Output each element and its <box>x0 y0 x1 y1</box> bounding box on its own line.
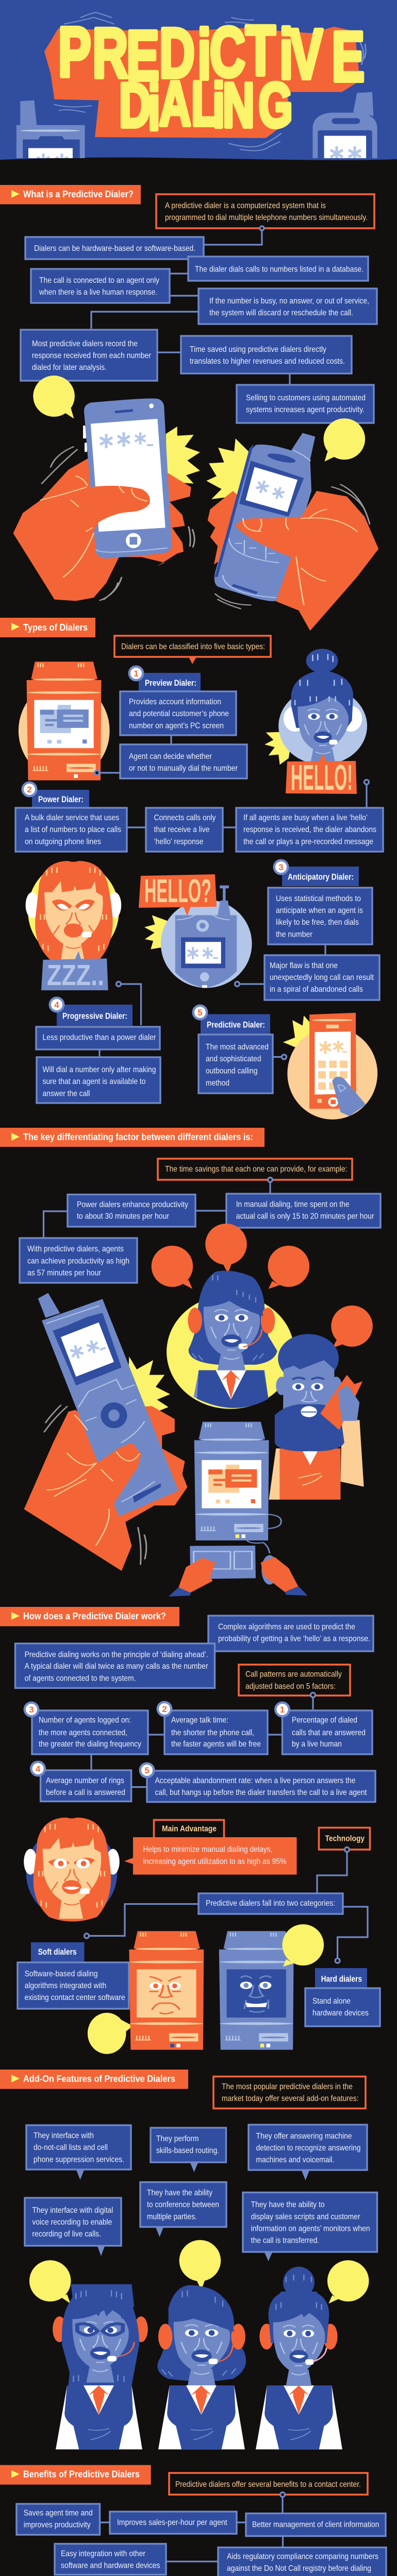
heading: What is a Predictive Dialer? <box>23 189 134 199</box>
feature: do-not-call: do-not-call lists and cell <box>34 2143 108 2152</box>
title <box>58 11 365 143</box>
factor 5: call, but hangs up before the dialer transfers the call to a live agent <box>155 1788 367 1797</box>
feature: sales scripts <box>243 2193 377 2261</box>
factor 4: 4 <box>36 1764 41 1774</box>
box: call patterns: Call patterns are automatically <box>245 1670 342 1679</box>
section: add-on features <box>0 2070 377 2449</box>
type 2: power dialer: ‘hello’ response <box>154 838 204 846</box>
box: busy number: the system will discard or reschedule the call. <box>209 309 353 317</box>
benefit: integration: software and hardware devices <box>61 2562 160 2570</box>
factor 3 <box>24 1701 148 1754</box>
factor 5: Acceptable abandonment rate: when a live person answers the <box>155 1776 356 1785</box>
factor 2: the shorter the phone call, <box>171 1728 254 1737</box>
type 5: predictive dialer <box>192 1005 287 1093</box>
heading: The key differentiating factor between different dialers is: <box>23 1132 253 1142</box>
box: record response <box>21 330 157 381</box>
type 3: anticipatory dialer: Major flaw is that one <box>270 961 338 970</box>
illustration: computer in peach circle <box>19 662 110 781</box>
type 4: progressive dialer: Will dial a number only after making <box>42 1065 156 1074</box>
benefit: compliance: against the Do Not Call registry before dialing <box>227 2564 371 2573</box>
type 1: preview dialer: Preview Dialer: <box>145 678 196 688</box>
benefit: saves time <box>16 2504 100 2535</box>
box: call patterns <box>239 1665 350 1696</box>
hello sign <box>286 754 357 798</box>
type 2: power dialer: A bulk dialer service that uses <box>25 814 119 822</box>
type 3: anticipatory dialer: anticipate when an agent is <box>276 906 363 915</box>
box: agent connection: The call is connected to an agent only <box>39 276 159 285</box>
box: predictive dialers <box>20 1238 137 1283</box>
feature: do-not-call <box>26 2125 131 2180</box>
box: record response: response received from each number <box>32 351 152 360</box>
computer and keyboard <box>169 1422 308 1597</box>
factor 1: Percentage of dialed <box>292 1716 357 1725</box>
type 4: progressive dialer: Progressive Dialer: <box>62 1011 127 1021</box>
factor 2 <box>157 1701 268 1754</box>
title: PREDiCTiVE <box>58 11 365 96</box>
feature: answering machine: machines and voicemail. <box>256 2156 334 2164</box>
type 1: preview dialer: number on agent’s PC screen <box>129 722 224 731</box>
section: key differentiating factor <box>0 1128 381 1597</box>
intro box: Predictive dialers offer several benefits to a contact center. <box>175 2480 361 2489</box>
factor 2: 2 <box>162 1704 167 1714</box>
intro box: market today offer several add-on features: <box>222 2094 359 2103</box>
soft dialers: Soft dialers <box>38 1947 77 1957</box>
feature: do-not-call: They interface with <box>34 2131 94 2140</box>
hard dialers <box>305 1968 380 2026</box>
benefit: saves time: improves productivity <box>24 2521 91 2530</box>
box: manual dialing <box>226 1194 381 1228</box>
intro box <box>169 2473 368 2495</box>
soft dialers <box>18 1942 129 2009</box>
box: dialing ahead: A typical dialer will dial twice as many calls as the number <box>25 1662 208 1671</box>
feature: skills routing: They perform <box>156 2134 199 2143</box>
type 4: progressive dialer: 4 <box>54 1000 59 1010</box>
box: busy number <box>198 289 377 324</box>
illustration: three agents with speech bubbles <box>29 2240 369 2449</box>
box: selling: Selling to customers using automated <box>246 394 366 402</box>
type 3: anticipatory dialer: 3 <box>278 862 284 872</box>
type 5: predictive dialer: Predictive Dialer: <box>207 1020 265 1030</box>
type 4: progressive dialer: Less productive than a power dialer <box>42 1033 156 1042</box>
type 2: power dialer: response is received, the dialer abandons <box>243 825 376 834</box>
type 3: anticipatory dialer <box>235 859 379 1000</box>
box: time saved: translates to higher revenues and reduced costs. <box>190 357 345 366</box>
type 2: power dialer <box>15 780 383 852</box>
feature: answering machine: They offer answering machine <box>256 2132 352 2141</box>
type 3: anticipatory dialer: the number <box>276 930 313 939</box>
benefit: sales per hour <box>110 2512 237 2534</box>
factor 2: Average talk time: <box>171 1716 228 1725</box>
box: time saved: Time saved using predictive dialers directly <box>190 345 326 354</box>
box: time saved <box>181 336 352 374</box>
illustration: walkie phone in pale circle <box>144 886 252 988</box>
illustration: two computers with faces <box>88 1924 324 2054</box>
feature: voice recording: They interface with digital <box>32 2206 113 2215</box>
benefit: sales per hour: Improves sales-per-hour per agent <box>117 2518 227 2527</box>
feature: conference: They have the ability <box>147 2189 212 2197</box>
intro box: Dialers can be classified into five basic types: <box>121 642 265 651</box>
factor 1 <box>274 1701 372 1754</box>
type 5: predictive dialer: outbound calling <box>206 1066 258 1076</box>
factor 3: the more agents connected, <box>39 1728 127 1737</box>
box: record response: dialed for later analysis. <box>32 363 107 372</box>
box: power dialers: Power dialers enhance productivity <box>77 1200 188 1209</box>
feature: sales scripts: display sales scripts and customer <box>251 2212 360 2222</box>
type 5: predictive dialer: method <box>206 1079 229 1088</box>
technology box <box>319 1828 370 1850</box>
soft dialers: Software-based dialing <box>25 1970 98 1978</box>
box: power dialers: to about 30 minutes per hour <box>77 1212 170 1221</box>
factor 1: by a live human <box>292 1740 342 1749</box>
box: algorithms: probability of getting a live ‘hello’ as a response. <box>218 1635 370 1643</box>
hard dialers: Stand alone <box>312 1997 351 2006</box>
definition box: A predictive dialer is a computerized system that is <box>165 201 326 210</box>
box: hardware or software: Dialers can be hardware-based or software-based. <box>34 244 195 253</box>
hello question sign <box>139 872 217 916</box>
type 4: progressive dialer <box>36 982 160 1103</box>
benefit: saves time: Saves agent time and <box>24 2509 93 2517</box>
feature: skills routing <box>151 2128 226 2172</box>
heading <box>0 1128 264 1147</box>
heading <box>0 2070 188 2089</box>
illustration: red-haired woman sleeping <box>26 861 121 990</box>
box: predictive dialers: can achieve productivity as high <box>27 1257 129 1265</box>
feature: answering machine: detection to recognize answering <box>256 2144 361 2153</box>
type 3: anticipatory dialer: Anticipatory Dialer: <box>288 872 354 882</box>
hard dialers: Hard dialers <box>321 1974 362 1984</box>
type 2: power dialer: If all agents are busy when a live ‘hello’ <box>243 814 368 822</box>
soft dialers: existing contact center software <box>25 1993 125 2002</box>
header phones and wiggles <box>16 12 377 168</box>
type 4: progressive dialer: answer the call <box>42 1089 90 1098</box>
intro box <box>213 2076 366 2108</box>
header band with title <box>0 0 397 168</box>
intro box <box>114 636 271 664</box>
illustration: phone with finger in peach circle <box>283 1013 377 1120</box>
illustration: two hands holding phones <box>13 376 378 631</box>
box: database: The dialer dials calls to numbers listed in a database. <box>195 265 363 274</box>
illustration: red-haired woman in blue circle <box>24 1818 120 1922</box>
benefit: client information: Better management of client information <box>252 2520 379 2529</box>
intro box: The time savings that each one can provide, for example: <box>165 1165 348 1174</box>
heading <box>0 618 95 637</box>
feature: skills routing: skills-based routing. <box>156 2146 219 2155</box>
benefit: integration: Easy integration with other <box>61 2549 146 2558</box>
benefit: client information <box>246 2513 386 2536</box>
type 1: preview dialer: and potential customer’s phone <box>129 709 229 718</box>
type 1: preview dialer <box>95 666 247 778</box>
feature: sales scripts: the call is transferred. <box>251 2236 319 2245</box>
type 1: preview dialer: 1 <box>134 669 139 679</box>
section: benefits <box>0 2465 386 2576</box>
heading: How does a Predictive Dialer work? <box>23 1611 166 1621</box>
asterisks on phone screens <box>100 432 286 501</box>
feature: sales scripts: They have the ability to <box>251 2200 325 2209</box>
technology box: Technology <box>325 1835 365 1843</box>
main advantage callout <box>124 1820 297 1875</box>
box: agent connection: when there is a live human response. <box>39 288 157 297</box>
illustration: woman with bun saying hello <box>264 649 367 765</box>
box: two categories: Predictive dialers fall into two categories: <box>206 1899 335 1908</box>
type 2: power dialer: 2 <box>27 785 32 794</box>
heading <box>0 1607 179 1626</box>
type 2: power dialer: that receive a live <box>154 825 210 834</box>
factor 3: 3 <box>29 1705 34 1715</box>
heading: Benefits of Predictive Dialers <box>23 2469 140 2480</box>
heading <box>0 2465 151 2485</box>
type 2: power dialer: a list of numbers to place calls <box>25 825 121 834</box>
type 3: anticipatory dialer: in a spiral of abandoned calls <box>270 985 363 994</box>
heading: Types of Dialers <box>23 622 88 633</box>
type 4: progressive dialer: sure that an agent is available to <box>42 1077 146 1086</box>
factor 1: calls that are answered <box>292 1728 366 1737</box>
feature: voice recording: recording of live calls. <box>32 2230 101 2239</box>
main advantage callout: Main Advantage <box>162 1825 217 1834</box>
box: manual dialing: In manual dialing, time spent on the <box>236 1200 350 1209</box>
hard dialers: hardware devices <box>312 2009 369 2018</box>
type 1: preview dialer: Provides account information <box>129 698 221 706</box>
phone asterisks <box>188 947 218 959</box>
box: power dialers <box>68 1194 195 1227</box>
woman agent in yellow circle <box>167 1271 294 1409</box>
feature: voice recording: voice recording to enable <box>32 2218 112 2227</box>
illustration: agents, phone and computer <box>24 1224 373 1597</box>
box: database <box>188 257 368 281</box>
box: predictive dialers: as 57 minutes per hour <box>27 1269 102 1278</box>
type 2: power dialer: the call or plays a pre-recorded message <box>243 838 373 846</box>
box: dialing ahead: of agents connected to the system. <box>25 1674 136 1683</box>
main advantage callout: increasing agent utilization to as high as 95% <box>143 1857 287 1866</box>
factor 4: Average number of rings <box>46 1776 124 1785</box>
tilted phone and hand <box>24 1293 187 1571</box>
type 3: anticipatory dialer: Uses statistical methods to <box>276 894 361 903</box>
type 2: power dialer: Power Dialer: <box>38 794 84 804</box>
title: DiALiNG <box>119 69 293 143</box>
type 2: power dialer: on outgoing phone lines <box>25 838 101 846</box>
feature: conference: to conference between <box>147 2200 219 2209</box>
agent 1 <box>53 2284 148 2449</box>
feature: sales scripts: information on agents’ monitors when <box>251 2225 370 2233</box>
feature: conference: multiple parties. <box>147 2212 197 2222</box>
type 5: predictive dialer: The most advanced <box>206 1043 269 1052</box>
agent 3 <box>256 2267 342 2449</box>
hello question sign: HELLO? <box>144 872 211 909</box>
box: algorithms: Complex algorithms are used to predict the <box>218 1623 355 1631</box>
factor 2: the faster agents will be free <box>171 1740 261 1749</box>
box: two categories <box>198 1893 343 1914</box>
box: dialing ahead <box>15 1643 214 1688</box>
factor 3: the greater the dialing frequency <box>39 1740 141 1749</box>
factor 5: 5 <box>144 1766 150 1775</box>
benefit: compliance: Aids regulatory compliance comparing numbers <box>227 2552 378 2561</box>
type 1: preview dialer: Agent can decide whether <box>129 752 212 761</box>
factor 4: before a call is answered <box>46 1788 125 1797</box>
box: selling: systems increases agent productivity. <box>246 405 365 414</box>
box: busy number: If the number is busy, no answer, or out of service, <box>209 297 369 306</box>
type 5: predictive dialer: 5 <box>197 1008 203 1018</box>
type 3: anticipatory dialer: unexpectedly long call can result <box>270 973 374 982</box>
man with beard on phone <box>269 1334 364 1500</box>
type 2: power dialer: Connects calls only <box>154 814 216 822</box>
asterisks on tilted phone <box>70 1339 106 1360</box>
factor 4 <box>30 1761 131 1801</box>
intro box <box>158 1159 352 1180</box>
factor 3: Number of agents logged on: <box>39 1716 131 1725</box>
definition box <box>156 194 374 228</box>
box: hardware or software <box>25 237 204 259</box>
soft dialers: algorithms integrated with <box>25 1981 106 1990</box>
zzz caption: ZZZ.. <box>47 959 104 992</box>
section: what is a predictive dialer <box>0 185 378 631</box>
feature: voice recording <box>25 2198 121 2256</box>
orange speech bubbles <box>152 1224 373 1348</box>
section: how does a predictive dialer work <box>0 1607 380 2054</box>
box: selling <box>237 385 374 423</box>
intro box: The most popular predictive dialers in the <box>222 2082 353 2091</box>
benefit: compliance <box>218 2547 386 2576</box>
box: algorithms <box>208 1616 373 1651</box>
factor 5 <box>139 1762 375 1802</box>
feature: conference <box>140 2182 226 2237</box>
type 5: predictive dialer: and sophisticated <box>206 1055 261 1063</box>
heading <box>0 185 141 204</box>
factor 1: 1 <box>280 1705 285 1715</box>
type 1: preview dialer: or not to manually dial the number <box>129 764 238 773</box>
box: predictive dialers: With predictive dialers, agents <box>27 1245 124 1253</box>
benefit: integration <box>55 2544 166 2575</box>
section: types of dialers <box>0 618 383 1120</box>
box: record response: Most predictive dialers record the <box>32 340 138 348</box>
agent 2 <box>157 2285 246 2449</box>
type 3: anticipatory dialer: likely to be free, then dials <box>276 918 359 927</box>
box: agent connection <box>31 269 170 303</box>
box: manual dialing: actual call is only 15 to 20 minutes per hour <box>236 1212 374 1221</box>
feature: answering machine <box>249 2125 367 2180</box>
definition box: programmed to dial multiple telephone numbers simultaneously. <box>165 213 368 222</box>
box: dialing ahead: Predictive dialing works on the principle of ‘dialing ahead’. <box>25 1651 208 1659</box>
heading: Add-On Features of Predictive Dialers <box>23 2074 175 2084</box>
feature: do-not-call: phone suppression services. <box>34 2155 124 2164</box>
box: call patterns: adjusted based on 5 factors: <box>245 1682 336 1691</box>
main advantage callout: Helps to minimize manual dialing delays, <box>143 1845 272 1854</box>
